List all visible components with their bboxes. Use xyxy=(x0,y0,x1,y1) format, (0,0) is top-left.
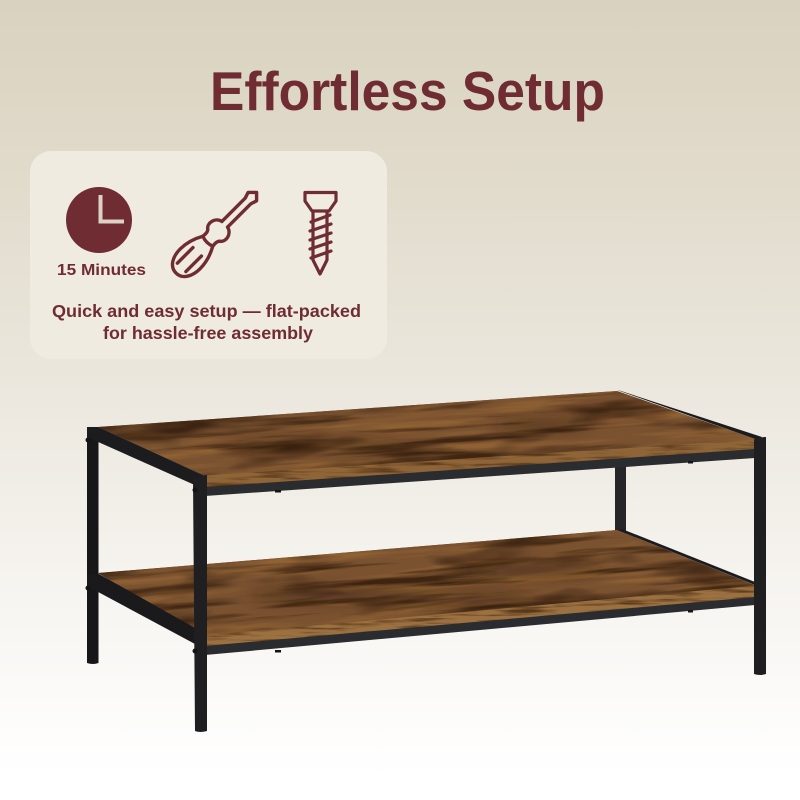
lower shelf xyxy=(98,530,754,636)
front left leg xyxy=(193,475,207,732)
title: Effortless Setup xyxy=(210,60,605,122)
icon: clock xyxy=(66,187,132,253)
top shelf surface xyxy=(98,391,754,476)
lower shelf front edge xyxy=(207,586,754,646)
label: 15 Minutes: 15 Minutes xyxy=(57,262,146,279)
description line 1: Quick and easy setup — flat-packed xyxy=(52,301,361,321)
icon: screw xyxy=(305,192,336,274)
top front rail xyxy=(205,449,755,496)
lower front rail xyxy=(205,597,755,655)
bolts xyxy=(86,438,693,654)
coffee table xyxy=(86,390,766,732)
description line 2: for hassle-free assembly xyxy=(103,323,313,343)
panel: setup info xyxy=(30,151,387,359)
icon: screwdriver xyxy=(166,183,266,283)
top shelf front edge xyxy=(207,440,754,487)
top side rail xyxy=(87,427,205,486)
back left leg xyxy=(87,432,98,664)
lower side rail xyxy=(87,574,195,644)
back right leg xyxy=(615,462,626,532)
lower back right rail xyxy=(617,529,755,585)
top back right rail xyxy=(617,390,762,440)
front right leg xyxy=(754,437,766,675)
